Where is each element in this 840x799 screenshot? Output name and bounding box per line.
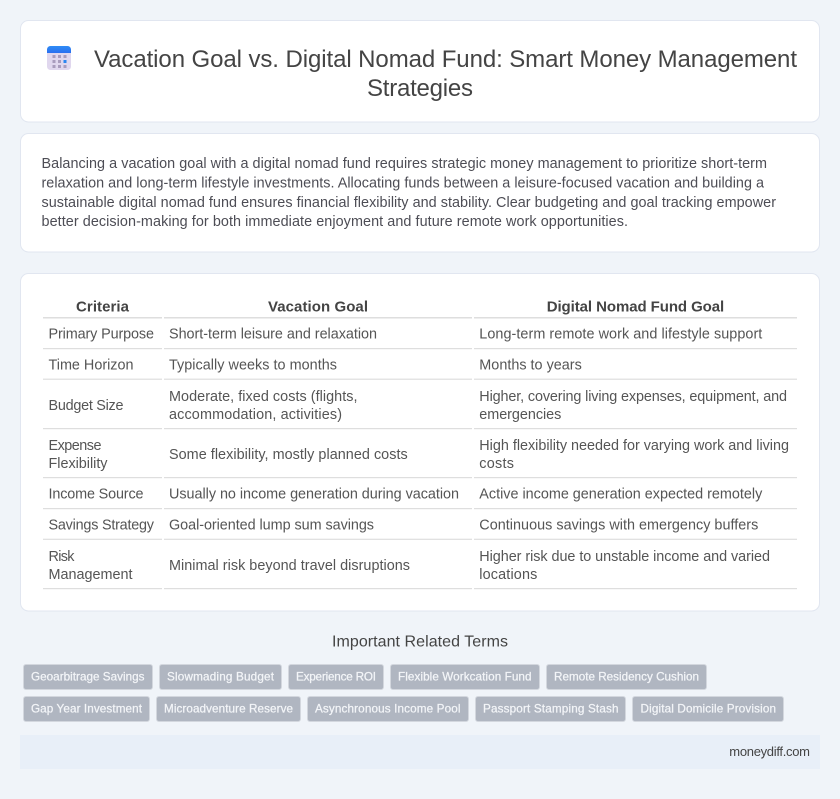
title: Vacation Goal vs. Digital Nomad Fund: Smart Money Management — [94, 46, 797, 73]
table row: income source: Income Source — [48, 486, 144, 502]
table row: expense flexibility: Flexibility — [48, 456, 108, 472]
table row: expense flexibility: costs — [479, 456, 514, 472]
table row: budget size — [43, 389, 797, 429]
table row: time horizon — [43, 358, 797, 380]
tag — [390, 664, 540, 690]
table row: savings strategy: Goal-oriented lump sum savings — [169, 518, 374, 534]
tag: Passport Stamping Stash — [483, 703, 618, 716]
text block: description: better decision-making for both immediate enjoyment and future remote work opportunities. — [42, 214, 628, 230]
text block: description — [42, 156, 776, 230]
tag — [24, 664, 152, 690]
related term tags — [24, 664, 784, 722]
icon: calendar — [47, 46, 71, 70]
table row: savings strategy: Continuous savings with emergency buffers — [479, 518, 758, 534]
tag — [156, 696, 300, 722]
text block: description: sustainable digital nomad fund ensures financial flexibility and stability. Clear budgeting and goal tracking empower — [42, 195, 776, 211]
table row: time horizon: Typically weeks to months — [169, 358, 337, 374]
tag — [160, 664, 282, 690]
panel: description card — [20, 134, 820, 252]
table row: income source: Usually no income generation during vacation — [169, 486, 459, 502]
tag — [24, 696, 150, 722]
tag — [632, 696, 784, 722]
table row: budget size: Higher, covering living expenses, equipment, and — [479, 389, 787, 405]
panel: title card — [20, 20, 820, 122]
table row: risk management: locations — [479, 567, 537, 583]
table row: savings strategy — [43, 518, 797, 540]
table row: savings strategy: Savings Strategy — [48, 518, 155, 534]
table header: Digital Nomad Fund Goal — [547, 298, 724, 316]
tag — [308, 696, 468, 722]
text block: description: Balancing a vacation goal with a digital nomad fund requires strategic money management to prioritize short-term — [42, 156, 767, 172]
table row: risk management: Minimal risk beyond travel disruptions — [169, 558, 410, 574]
table row: primary purpose — [43, 326, 797, 349]
tag: Microadventure Reserve — [164, 703, 293, 716]
table row: risk management — [43, 549, 797, 589]
table row: budget size: Moderate, fixed costs (flights, — [169, 389, 358, 405]
table row: time horizon: Time Horizon — [48, 358, 134, 374]
tag: Asynchronous Income Pool — [315, 703, 460, 716]
tag: Flexible Workcation Fund — [398, 671, 532, 684]
title — [94, 46, 797, 102]
table header: Criteria — [76, 298, 130, 316]
table row: risk management: Management — [48, 567, 132, 583]
tag: Experience ROI — [296, 671, 376, 684]
footer — [20, 735, 820, 769]
table row: income source — [43, 486, 797, 509]
table row: time horizon: Months to years — [479, 358, 582, 374]
tag: Digital Domicile Provision — [640, 703, 776, 716]
tag: Remote Residency Cushion — [554, 671, 699, 684]
table row: expense flexibility — [43, 438, 797, 478]
table row: risk management: Higher risk due to unstable income and varied — [479, 549, 770, 565]
tag: Slowmading Budget — [167, 671, 275, 684]
table row: expense flexibility: Expense — [48, 438, 102, 454]
table row: expense flexibility: Some flexibility, mostly planned costs — [169, 447, 408, 463]
heading: related terms: Important Related Terms — [332, 634, 508, 650]
table row: budget size: emergencies — [479, 407, 561, 423]
table row: primary purpose: Short-term leisure and relaxation — [169, 326, 377, 342]
table row: expense flexibility: High flexibility needed for varying work and living — [479, 438, 789, 454]
table row: income source: Active income generation expected remotely — [479, 486, 763, 502]
table row: primary purpose: Long-term remote work and lifestyle support — [479, 326, 762, 342]
table row: risk management: Risk — [48, 549, 75, 565]
tag — [476, 696, 626, 722]
text block: description: relaxation and long-term lifestyle investments. Allocating funds between a leisure-focused vacation and building a — [42, 176, 764, 192]
tag: Gap Year Investment — [31, 703, 143, 716]
tag — [288, 664, 384, 690]
table row: primary purpose: Primary Purpose — [48, 326, 154, 342]
tag: Geoarbitrage Savings — [31, 671, 145, 684]
tag — [546, 664, 706, 690]
table header: Vacation Goal — [268, 298, 368, 316]
table row: budget size: accommodation, activities) — [169, 407, 342, 423]
footer: moneydiff.com — [729, 744, 810, 759]
panel: comparison table card — [20, 274, 820, 611]
table header — [43, 298, 797, 318]
title: Strategies — [367, 75, 473, 102]
table row: budget size: Budget Size — [48, 398, 124, 414]
